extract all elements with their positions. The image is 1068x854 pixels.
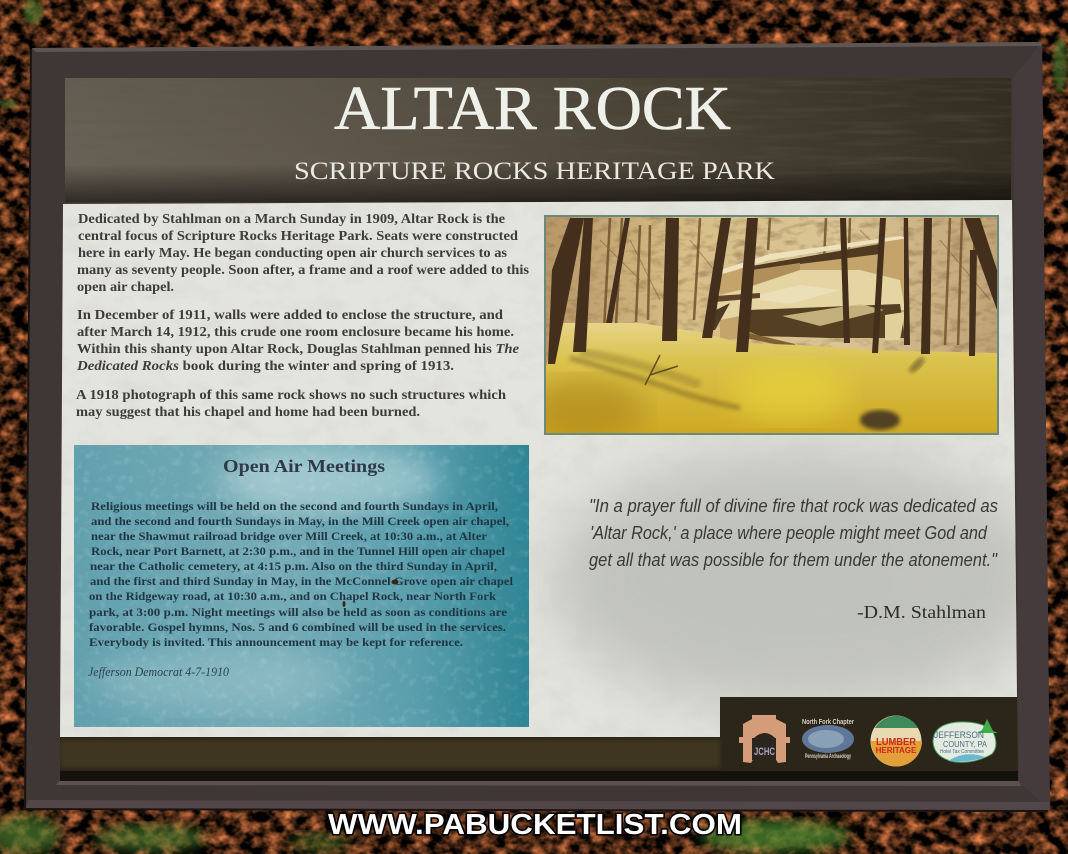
intro text: many as seventy people. Soon after, a frame and a roof were added to this bbox=[77, 262, 529, 277]
lower dark strip with logo area bbox=[60, 697, 1018, 781]
logo: Jefferson County: Hotel Tax Committee bbox=[940, 749, 984, 755]
subtitle: SCRIPTURE ROCKS HERITAGE PARK bbox=[294, 158, 775, 185]
intro text: here in early May. He began conducting open air church services to as bbox=[78, 245, 507, 260]
meetings text: and the first and third Sunday in May, in the McConnel Grove open air chapel bbox=[90, 574, 514, 588]
meetings text: on the Ridgeway road, at 10:30 a.m., and on Chapel Rock, near North Fork bbox=[89, 589, 496, 603]
quotation bbox=[589, 496, 998, 570]
intro text: Within this shanty upon Altar Rock, Douglas Stahlman penned his The bbox=[77, 341, 519, 356]
meetings text: Religious meetings will be held on the second and fourth Sundays in April, bbox=[91, 499, 498, 513]
logo: Jefferson County: COUNTY, PA bbox=[943, 739, 987, 749]
distant thin trees bbox=[600, 218, 990, 345]
logos bbox=[739, 715, 998, 766]
intro text: open air chapel. bbox=[77, 279, 174, 294]
meetings text: favorable. Gospel hymns, Nos. 5 and 6 combined will be used in the services. bbox=[89, 620, 506, 634]
foreground tree trunks bbox=[548, 218, 997, 364]
header band bbox=[65, 75, 1011, 202]
logo: JCHC arch: JCHC bbox=[754, 746, 775, 758]
chapel building on rock bbox=[708, 236, 908, 348]
source credit: Jefferson Democrat 4-7-1910 bbox=[88, 665, 230, 679]
logo: JCHC arch bbox=[739, 715, 790, 763]
quotation: get all that was possible for them under the atonement." bbox=[589, 550, 998, 570]
intro text: In December of 1911, walls were added to enclose the structure, and bbox=[77, 307, 504, 322]
logo: Jefferson County: JEFFERSON bbox=[934, 730, 984, 740]
logo: Jefferson County bbox=[933, 719, 998, 762]
meetings text: park, at 3:00 p.m. Night meetings will also be held as soon as conditions are bbox=[89, 605, 508, 619]
logo: North Fork Chapter: North Fork Chapter bbox=[802, 717, 854, 726]
snow ground bbox=[546, 323, 997, 433]
meetings text: Everybody is invited. This announcement may be kept for reference. bbox=[89, 635, 463, 649]
logo: Lumber Heritage: LUMBER bbox=[876, 737, 917, 748]
logo: North Fork Chapter: Pennsylvania Archaeology bbox=[805, 754, 851, 760]
main white panel bbox=[60, 200, 1050, 740]
heading: Open Air Meetings bbox=[223, 456, 385, 476]
logo: Lumber Heritage bbox=[870, 716, 922, 766]
meetings text: near the Catholic cemetery, at 4:15 p.m. Also on the third Sunday in April, bbox=[90, 559, 497, 573]
meetings text: Rock, near Port Barnett, at 2:30 p.m., and in the Tunnel Hill open air chapel bbox=[91, 544, 506, 558]
title: ALTAR ROCK bbox=[334, 75, 731, 143]
quote attribution: -D.M. Stahlman bbox=[857, 602, 986, 622]
historic photo of Altar Rock chapel bbox=[525, 215, 999, 442]
panel: Open Air Meetings bbox=[74, 445, 529, 727]
intro text bbox=[76, 211, 529, 419]
logo: North Fork Chapter bbox=[802, 717, 854, 760]
intro text: central focus of Scripture Rocks Heritage Park. Seats were constructed bbox=[78, 228, 519, 243]
intro text: after March 14, 1912, this crude one room enclosure became his home. bbox=[77, 324, 514, 339]
quotation: 'Altar Rock,' a place where people might meet God and bbox=[590, 523, 988, 543]
logo: Lumber Heritage: HERITAGE bbox=[876, 746, 917, 755]
intro text: may suggest that his chapel and home had been burned. bbox=[76, 404, 420, 419]
quotation: "In a prayer full of divine fire that rock was dedicated as bbox=[589, 496, 998, 516]
meetings text: and the second and fourth Sundays in May, in the Mill Creek open air chapel, bbox=[91, 514, 509, 528]
intro text: Dedicated by Stahlman on a March Sunday in 1909, Altar Rock is the bbox=[78, 211, 505, 226]
website watermark: WWW.PABUCKETLIST.COM bbox=[328, 809, 742, 841]
meetings text bbox=[89, 499, 514, 649]
meetings text: near the Shawmut railroad bridge over Mill Creek, at 10:30 a.m., at Alter bbox=[91, 529, 488, 543]
intro text: A 1918 photograph of this same rock shows no such structures which bbox=[76, 387, 507, 402]
intro text: Dedicated Rocks book during the winter and spring of 1913. bbox=[76, 358, 454, 373]
